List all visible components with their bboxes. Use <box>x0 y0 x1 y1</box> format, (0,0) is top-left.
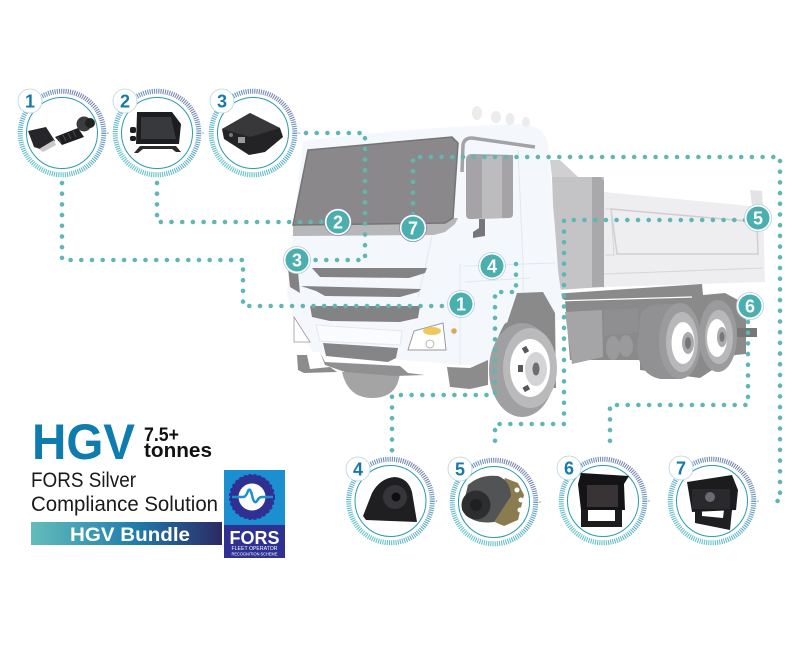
product 2: monitor: 2 <box>120 92 130 112</box>
product 4: side camera: 4 <box>353 460 363 480</box>
product 6: rear camera: 6 <box>564 458 574 478</box>
connector line 3 <box>306 133 365 260</box>
truck badge 3: 3 <box>292 250 302 270</box>
weight label: tonnes <box>144 440 212 462</box>
truck badge 4: 4 <box>487 256 497 276</box>
roof lamps <box>472 106 530 127</box>
product 6: rear camera <box>557 456 650 543</box>
FORS logo: RECOGNITION SCHEME <box>232 552 278 556</box>
product 5: reversing buzzer <box>448 457 541 544</box>
truck badge 7 <box>400 214 426 242</box>
truck badge 4 <box>478 252 506 280</box>
product 4: side camera <box>346 457 437 543</box>
rear wheels <box>637 300 737 379</box>
cab panel lines <box>418 150 555 365</box>
cab <box>287 124 566 365</box>
bumper and skid plate <box>297 343 488 389</box>
side mirror and door frame <box>462 138 535 238</box>
front axle wheel under bumper <box>342 372 400 398</box>
truck badge 5 <box>744 204 772 232</box>
truck badge 2: 2 <box>333 212 343 232</box>
connector line 2 <box>157 183 325 222</box>
subtitle <box>31 469 218 516</box>
truck badge 7: 7 <box>408 218 418 238</box>
truck illustration <box>287 106 765 417</box>
truck badge 6: 6 <box>745 296 755 316</box>
product 7: cab camera: 7 <box>676 458 686 478</box>
lower bumper panel <box>316 325 402 345</box>
FORS logo <box>224 470 285 558</box>
subtitle: Compliance Solution <box>31 493 218 516</box>
subtitle: FORS Silver <box>31 469 136 492</box>
headlights <box>294 317 457 350</box>
product 1: cable harness: 1 <box>25 92 35 112</box>
cab shadow band <box>293 218 458 236</box>
grilles <box>288 268 427 322</box>
truck badge 6 <box>736 292 764 320</box>
product 1: cable harness <box>18 89 109 175</box>
truck badge 5: 5 <box>753 208 763 228</box>
chassis <box>552 284 757 378</box>
product 7: cab camera <box>669 456 759 543</box>
product 3: recorder <box>210 89 300 175</box>
connector line 7 <box>413 157 780 501</box>
weight label <box>144 425 212 462</box>
truck badge 1 <box>448 290 474 318</box>
tipper body <box>550 160 765 290</box>
product 5: reversing buzzer: 5 <box>455 460 465 480</box>
front wheel <box>489 323 557 417</box>
truck badge 1: 1 <box>456 294 466 314</box>
FORS logo: FLEET OPERATOR <box>232 546 278 552</box>
truck badge 2 <box>324 208 352 236</box>
product 2: monitor <box>113 89 204 175</box>
title: HGV: HGV <box>32 414 136 470</box>
connector line 5 <box>495 220 745 450</box>
connector line 6 <box>610 322 748 448</box>
truck badge 3 <box>284 246 310 274</box>
connector line 4 <box>392 264 516 452</box>
windshield <box>293 137 458 225</box>
front wheel arch <box>497 292 556 388</box>
connector line 1 <box>62 183 450 306</box>
weight label: 7.5+ <box>144 425 179 446</box>
FORS logo: FORS <box>230 528 280 548</box>
HGV Bundle banner: HGV Bundle <box>70 525 190 546</box>
HGV Bundle banner <box>31 522 222 546</box>
product 3: recorder: 3 <box>217 92 227 112</box>
